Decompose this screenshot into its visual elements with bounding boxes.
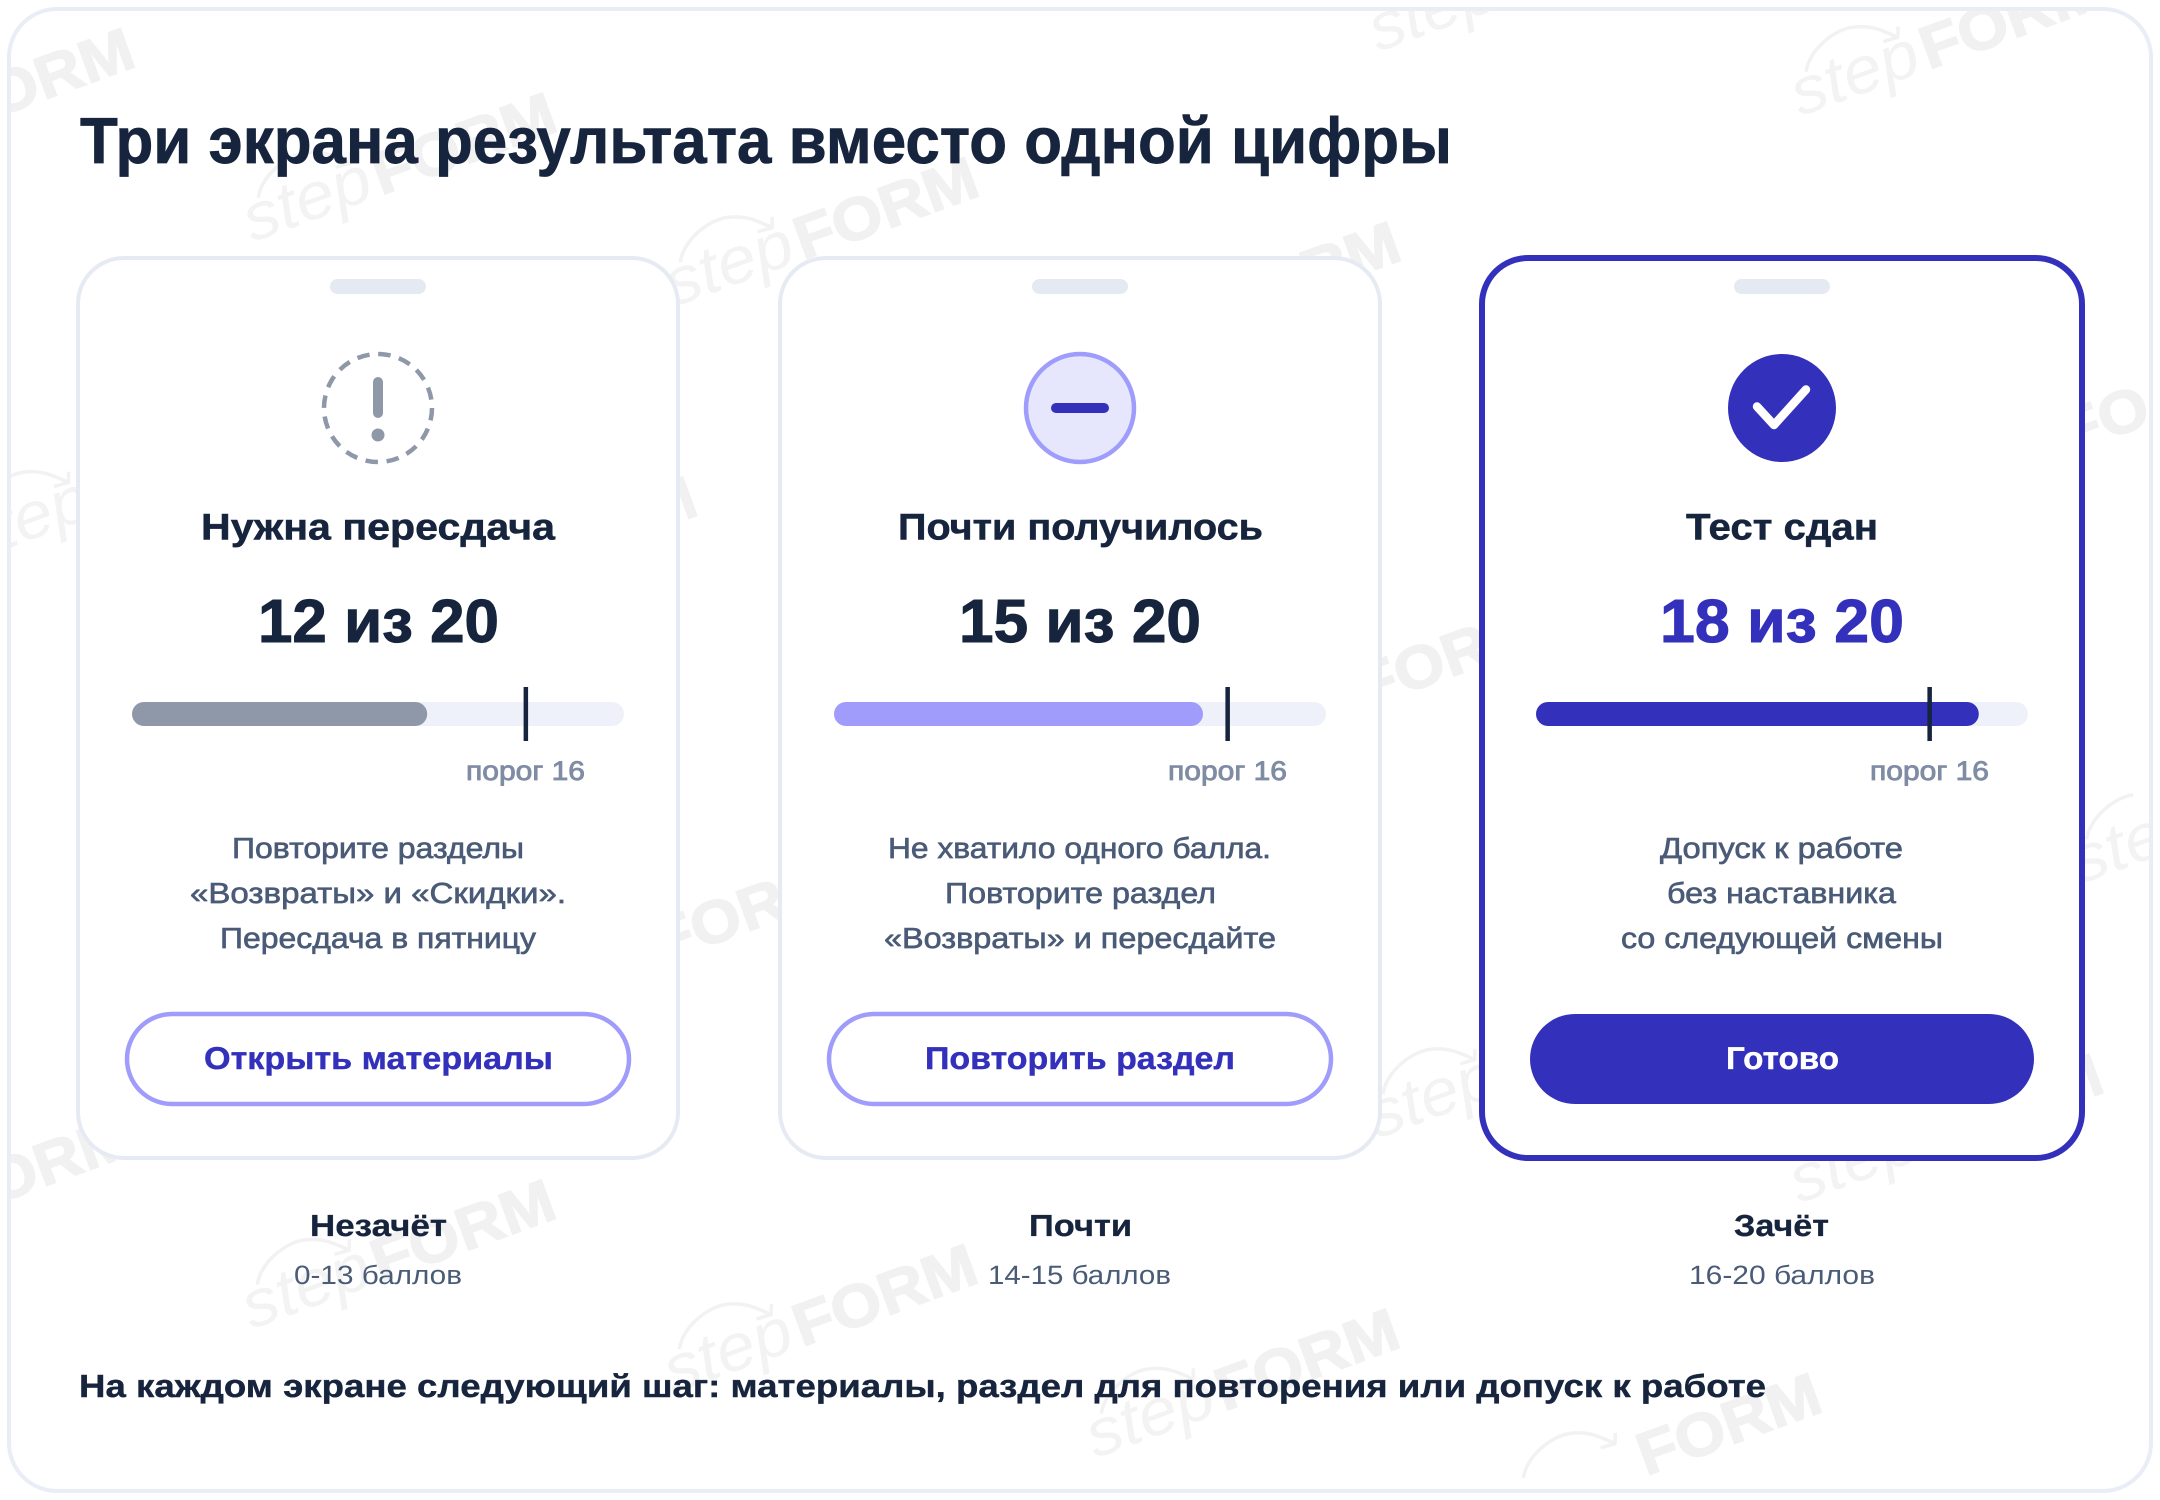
description 3: со следующей смены	[1621, 923, 1943, 955]
watermark pattern: stepFORM: step	[654, 205, 803, 320]
button 2: Повторить раздел	[925, 1040, 1235, 1076]
panel: screen 3, passed	[1482, 258, 2082, 1158]
caption 2: 14-15 баллов	[988, 1260, 1171, 1290]
description 2: «Возвраты» и пересдайте	[884, 923, 1276, 955]
progress bar 3	[1536, 687, 2028, 741]
icon: minus in circle	[1026, 354, 1134, 462]
watermark pattern: stepFORM: FORM	[362, 1166, 564, 1295]
watermark pattern: stepFORM: FORM	[643, 847, 846, 975]
button 1	[127, 1014, 629, 1104]
caption 1	[294, 1209, 462, 1290]
caption 2	[988, 1209, 1171, 1290]
notch 2	[1032, 279, 1128, 294]
score 1: 12 из 20	[258, 587, 499, 655]
watermark pattern: stepFORM: step	[512, 908, 662, 1023]
watermark pattern: stepFORM: FORM	[784, 1231, 986, 1359]
watermark pattern: stepFORM: step	[653, 1292, 802, 1407]
threshold label 3: порог 16	[1870, 756, 1989, 786]
watermark pattern: stepFORM: step	[372, 525, 521, 639]
phone frame 2	[780, 258, 1380, 1158]
description 3	[1621, 833, 1943, 955]
caption 3: Зачёт	[1734, 1209, 1829, 1243]
button 3: Готово	[1726, 1040, 1839, 1076]
watermark pattern: stepFORM: step	[232, 141, 381, 256]
caption 1: 0-13 баллов	[294, 1260, 462, 1290]
description 2: Не хватило одного балла.	[888, 833, 1271, 865]
description 2	[884, 833, 1276, 955]
watermark pattern: stepFORM: FORM	[1909, 1041, 2112, 1169]
description 1	[190, 833, 566, 955]
description 1: Пересдача в пятницу	[220, 923, 537, 955]
description 3: без наставника	[1667, 878, 1897, 910]
heading 2: Почти получилось	[898, 506, 1263, 548]
heading 1: Нужна пересдача	[201, 506, 555, 548]
watermark pattern: stepFORM: FO	[2051, 372, 2158, 466]
caption 3: 16-20 баллов	[1689, 1260, 1875, 1290]
panel: screen 1, retake	[78, 258, 678, 1158]
description 1: Повторите разделы	[232, 833, 524, 865]
watermark pattern: stepFORM: step	[1075, 1357, 1224, 1472]
watermark pattern: stepFORM: step	[1356, 1037, 1506, 1152]
watermark pattern: stepFORM: FORM	[81, 399, 283, 527]
description 1: «Возвраты» и «Скидки».	[190, 878, 566, 910]
watermark pattern: stepFORM: FORM	[363, 79, 565, 208]
threshold label 1: порог 16	[466, 756, 585, 786]
watermark pattern: stepFORM: FORM	[1487, 976, 1690, 1104]
progress bar 1	[132, 687, 624, 741]
caption 2: Почти	[1029, 1209, 1132, 1243]
watermark pattern: stepFORM: step	[231, 1228, 380, 1343]
watermark pattern: stepFORM: step	[1778, 1102, 1928, 1217]
watermark pattern: stepFORM: step	[1076, 270, 1225, 385]
watermark pattern: stepFORM: FORM	[1628, 1360, 1830, 1488]
icon: check in filled circle	[1728, 354, 1836, 462]
button 3	[1530, 1014, 2034, 1104]
watermark pattern: stepFORM: FORM	[1347, 592, 1549, 721]
phone frame 3 highlighted	[1482, 258, 2082, 1158]
footer note: На каждом экране следующий шаг: материалы, раздел для повторения или допуск к работе	[79, 1368, 1766, 1404]
watermark pattern: stepFORM: step	[1779, 15, 1929, 130]
watermark pattern: stepFORM: FORM	[1207, 208, 1409, 337]
watermark pattern: stepFORM: FORM	[785, 144, 987, 272]
description 3: Допуск к работе	[1660, 833, 1903, 865]
caption 1: Незачёт	[310, 1209, 447, 1243]
button 1: Открыть материалы	[204, 1040, 553, 1076]
watermark pattern: stepFORM: step	[1216, 654, 1365, 768]
score 2: 15 из 20	[959, 587, 1201, 655]
icon: dashed circle with exclamation mark	[324, 354, 432, 462]
progress bar 2	[834, 687, 1326, 741]
score 3: 18 из 20	[1660, 587, 1904, 655]
watermark pattern: stepFORM: FORM	[1206, 1295, 1408, 1424]
threshold label 2: порог 16	[1168, 756, 1287, 786]
description 2: Повторите раздел	[945, 878, 1216, 910]
watermark pattern: stepFORM: FORM	[503, 463, 705, 592]
notch 1	[330, 279, 426, 294]
phone frame 1	[78, 258, 678, 1158]
title: Три экрана результата вместо одной цифры	[80, 104, 1452, 177]
caption 3	[1689, 1209, 1875, 1290]
panel: screen 2, almost	[780, 258, 1380, 1158]
heading 3: Тест сдан	[1686, 506, 1878, 548]
notch 3	[1734, 279, 1830, 294]
button 2	[829, 1014, 1331, 1104]
